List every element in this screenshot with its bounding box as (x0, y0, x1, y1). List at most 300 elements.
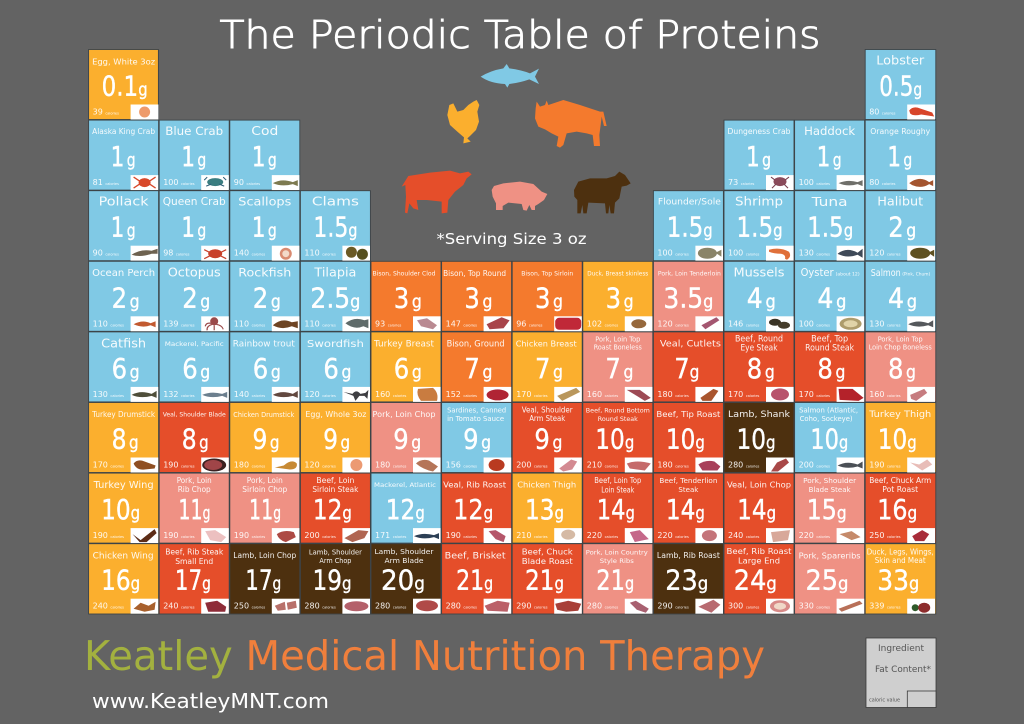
name: Blue Crab (165, 124, 223, 138)
cell: Pork, Loin Top Roast Boneless: Roast Boneless (594, 343, 642, 351)
cell: Dungeness Crab (724, 120, 794, 190)
cell: Beef, Brisket (442, 544, 512, 614)
name: Mackerel, Atlantic (374, 481, 436, 489)
calories: 120 calories (304, 390, 336, 399)
cell: Beef, Tip Roast (653, 402, 723, 472)
thumb: veal (484, 528, 511, 543)
name: Flounder/Sole (658, 198, 721, 208)
name: Mussels (734, 264, 785, 279)
name: Rainbow trout (233, 339, 295, 349)
thumb: beef (625, 458, 652, 472)
thumb: lamb (342, 599, 370, 614)
cell: Bison, Shoulder Clod (371, 261, 441, 331)
value: 9g (463, 422, 491, 456)
value: 1g (111, 211, 136, 244)
cell: Scallops (230, 191, 300, 261)
value: 16g (101, 564, 140, 597)
cell: Tuna (795, 191, 865, 261)
thumb: pork (625, 387, 652, 402)
name: Veal, Loin Chop (727, 481, 791, 490)
cell: Pork, Loin Rib Chop (159, 473, 229, 543)
cell: Beef, Tenderlion Steak (653, 473, 723, 543)
thumb: beef (484, 599, 511, 614)
thumb: fish (837, 246, 864, 261)
footer brand: Keatley Medical Nutrition Therapy (84, 632, 765, 680)
cell: Beef, Top Round Steak (795, 332, 865, 402)
cell: Duck, Legs, Wings, Skin and Meat: Skin and Meat (875, 556, 926, 565)
name: Pork, Spareribs (799, 552, 861, 561)
name: Clams (312, 194, 359, 209)
calories: 171 calories (375, 531, 407, 540)
cell: Lamb, Rib Roast (653, 544, 723, 614)
name: Queen Crab (163, 196, 226, 208)
thumb: beef (554, 599, 582, 614)
name: Pork, Loin (177, 476, 212, 485)
value: 3g (606, 281, 634, 314)
icon: fish (481, 64, 539, 88)
name: Pork, Loin Top (595, 335, 641, 343)
thumb: ribs (625, 599, 652, 614)
calories: 220 calories (657, 531, 689, 540)
value: 12g (313, 493, 352, 526)
calories: 210 calories (516, 531, 548, 540)
name: Pork, Loin Chop (372, 410, 436, 419)
calories: 90 calories (234, 178, 260, 187)
name: Egg, White 3oz (92, 58, 155, 66)
cell: Pollack (89, 191, 159, 261)
thumb: meat (484, 316, 511, 331)
thumb: veal (766, 528, 794, 543)
cell: Veal, Shoulder Arm Steak: Arm Steak (529, 414, 566, 423)
thumb: beef (201, 599, 229, 614)
thumb: fish (342, 316, 370, 331)
thumb: beef (907, 528, 935, 543)
name: Beef, Rib Roast (726, 547, 792, 556)
cell: Catfish (89, 332, 159, 402)
name: Tuna (810, 194, 848, 209)
name: Bison, Ground (447, 339, 505, 349)
cell: Turkey Breast (371, 332, 441, 402)
calories: 102 calories (587, 319, 618, 328)
value: 2g (888, 211, 916, 244)
calories: 81 calories (93, 178, 119, 187)
name: Bison, Top Sirloin (521, 269, 573, 277)
value: 21g (596, 564, 634, 597)
thumb: beef (625, 528, 652, 543)
value: 6g (253, 352, 281, 385)
calories: 200 calories (516, 460, 548, 470)
name: Beef, Round Bottom (586, 406, 650, 414)
name: Pork, Loin Country (586, 549, 648, 557)
thumb: veal (554, 458, 582, 472)
calories: 100 calories (799, 319, 830, 328)
calories: 130 calories (93, 390, 124, 399)
thumb: egg (342, 458, 370, 472)
thumb: beef (695, 528, 723, 543)
calories: 100 calories (163, 178, 195, 187)
calories: 39 calories (93, 108, 119, 116)
cell: Beef, Rib Steak Small End: Small End (175, 557, 213, 566)
calories: 330 calories (799, 602, 830, 611)
name: Chicken Wing (93, 552, 154, 562)
cell: Veal, Loin Chop (724, 473, 794, 543)
value: 6g (112, 352, 140, 385)
name: Beef, Tenderlion (659, 477, 717, 485)
cell: Chicken Thigh (512, 473, 582, 543)
thumb: veal (695, 387, 723, 402)
calories: 80 calories (869, 178, 896, 187)
cell: Beef, Tenderlion Steak: Steak (678, 486, 699, 494)
cell: Turkey Wing (89, 473, 159, 543)
thumb: duck (907, 599, 935, 614)
name: Beef, Rib Steak (165, 548, 224, 557)
calories: 140 calories (234, 390, 265, 399)
value: 13g (525, 493, 564, 526)
thumb: egg (131, 104, 158, 120)
thumb: fish (272, 175, 299, 190)
calories: 190 calories (163, 460, 195, 470)
value: 7g (464, 352, 492, 385)
thumb: sardines (484, 458, 511, 472)
cell: Halibut (865, 191, 936, 261)
value: 0.5g (879, 70, 922, 102)
calories: 190 calories (93, 531, 124, 540)
thumb: turkey (413, 387, 441, 402)
value: 8g (747, 352, 775, 385)
value: 4g (888, 281, 917, 314)
thumb: turkey (907, 458, 935, 472)
value: 3g (535, 281, 563, 314)
legend key (866, 638, 936, 708)
value: 2.5g (310, 281, 360, 314)
name: Oyster (801, 267, 834, 279)
thumb: crab (201, 246, 229, 261)
cell: Alaska King Crab (89, 120, 159, 190)
calories: 132 calories (163, 390, 195, 399)
cell: Beef, Loin Sirloin Steak (300, 473, 370, 543)
value: 10g (666, 422, 705, 456)
thumb: fish (837, 175, 864, 190)
cell: Lamb, Shoulder Arm Blade: Arm Blade (384, 557, 423, 565)
value: 20g (381, 564, 425, 597)
calories: 200 calories (304, 531, 336, 540)
cell: Beef, Rib Roast Large End (724, 544, 794, 614)
thumb: beef (766, 599, 794, 614)
value: 10g (595, 422, 634, 456)
cell: Lamb, Loin Chop (230, 544, 300, 614)
calories: 98 calories (163, 249, 190, 258)
thumb: fish (131, 246, 158, 261)
name: Beef, Round (735, 334, 783, 344)
name: Shrimp (735, 194, 783, 209)
cell: Beef, Chuck Blade Roast: Blade Roast (522, 557, 573, 566)
cell: Duck, Legs, Wings, Skin and Meat (865, 544, 936, 614)
thumb: oyster (837, 316, 864, 331)
name: Chicken Drumstick (233, 411, 295, 419)
cell: Octopus (159, 261, 229, 331)
value: 3g (394, 281, 422, 314)
calories: 220 calories (587, 531, 618, 540)
calories: 170 calories (799, 390, 830, 399)
thumb: pork (837, 528, 864, 543)
calories: 280 calories (304, 602, 336, 611)
thumb: crab (201, 175, 229, 190)
name: Lobster (876, 54, 924, 68)
cell: Beef, Round Eye Steak (724, 332, 794, 402)
cell: Egg, Whole (300, 402, 370, 472)
icon: bison (535, 100, 607, 148)
website: www.KeatleyMNT.com (92, 689, 329, 713)
thumb: ground meat (484, 387, 511, 402)
icon: sheep (574, 172, 631, 213)
name: Orange Roughy (870, 127, 931, 136)
name: Lamb, Shank (728, 410, 790, 420)
calories: 93 calories (375, 319, 401, 328)
calories: 210 calories (587, 460, 618, 470)
name: Catfish (101, 335, 146, 350)
cell: Beef, Loin Sirloin Steak: Sirloin Steak (312, 485, 359, 494)
value: 7g (674, 352, 699, 385)
calories: 250 calories (234, 602, 265, 611)
name: Beef, Chuck (522, 548, 573, 557)
name: Turkey Drumstick (91, 410, 156, 419)
thumb: octopus (201, 316, 229, 331)
name: Octopus (168, 265, 221, 279)
value: 12g (386, 493, 425, 526)
calories: 190 calories (234, 531, 265, 540)
cell: Lamb, Shank (724, 402, 794, 472)
name: Veal, Cutlets (660, 339, 722, 349)
cell: Lamb, Shoulder Arm Chop: Arm Chop (319, 557, 352, 565)
value: 1g (746, 140, 771, 173)
cell: Rockfish (230, 261, 300, 331)
thumb: pork (201, 528, 229, 543)
cell: Beef, Loin Top Loin Steak: Loin Steak (601, 486, 635, 495)
value: 6g (323, 352, 351, 385)
calories: 110 calories (93, 319, 124, 328)
icon: pig (492, 182, 547, 211)
name: Haddock (804, 124, 855, 138)
thumb: pork (907, 387, 935, 402)
value: 1.5g (667, 211, 713, 244)
value: 1g (887, 140, 912, 173)
calories: 130 calories (799, 249, 830, 258)
name: Pork, Shoulder (803, 477, 856, 485)
calories: 280 calories (446, 602, 477, 611)
calories: 220 calories (799, 531, 830, 540)
cell: Pork, Shoulder Blade Steak: Blade Steak (809, 486, 852, 494)
cell: Mackerel, Atlantic (371, 473, 441, 543)
calories: 240 calories (728, 531, 760, 540)
thumb: veal (201, 458, 229, 472)
cell: Shrimp (724, 191, 794, 261)
value: 1g (181, 140, 206, 173)
value: 4g (747, 281, 776, 314)
cell: Duck, Breast skinless (583, 261, 653, 331)
icon: cow (402, 171, 472, 213)
cell: Turkey Drumstick (89, 402, 159, 472)
cell: Clams (300, 191, 370, 261)
value: 2g (182, 281, 210, 314)
cell: Salmon (Atlantic, Coho, Sockeye): Coho, Sockeye) (800, 415, 853, 423)
thumb: shrimp (766, 246, 794, 261)
name: Lamb, Loin Chop (233, 551, 297, 560)
cell: Salmon (Pink, Chum): (Pink, Chum) (902, 271, 930, 277)
value: 7g (605, 352, 633, 385)
value: 1g (111, 140, 136, 173)
value: 1g (252, 211, 277, 244)
cell: Pork, Loin Country Style Ribs: Style Ribs (600, 557, 634, 565)
table of protein cells (89, 50, 936, 614)
calories: 290 calories (657, 602, 689, 611)
value: 2g (253, 281, 281, 314)
name: Pork, Loin Top (878, 335, 923, 343)
value: 14g (597, 493, 635, 526)
name: Turkey Thigh (868, 410, 931, 420)
thumb: lamb (766, 458, 794, 472)
title: The Periodic Table of Proteins (220, 13, 820, 57)
calories: 156 calories (446, 460, 477, 470)
name: Dungeness Crab (728, 127, 791, 136)
cell: Chicken Drumstick (230, 402, 300, 472)
value: 6g (394, 352, 422, 385)
value: 1.5g (313, 211, 357, 244)
calories: 190 calories (869, 460, 901, 470)
cell: Lamb, Shoulder Arm Chop (300, 544, 370, 614)
calories: 250 calories (869, 531, 901, 540)
legend key: Fat Content* (875, 665, 931, 675)
calories: 110 calories (234, 319, 265, 328)
value: 8g (817, 352, 845, 385)
calories: 120 calories (304, 460, 336, 470)
legend key: caloric value (869, 698, 900, 704)
name: Pork, Loin Tenderloin (658, 269, 721, 277)
name: Mackerel, Pacific (165, 340, 224, 348)
thumb: chicken (554, 387, 582, 402)
calories: 170 calories (728, 390, 760, 399)
cell: Pork, Spareribs (795, 544, 865, 614)
thumb: beef (695, 458, 723, 472)
calories: 180 calories (375, 460, 407, 470)
name: Chicken Breast (516, 339, 577, 348)
cell: Veal, Rib Roast (442, 473, 512, 543)
thumb: pork (272, 528, 299, 543)
name: Alaska King Crab (92, 127, 155, 136)
calories: 180 calories (234, 460, 265, 470)
cell: Lobster (865, 50, 936, 120)
calories: 180 calories (657, 390, 689, 399)
cell: Chicken Wing (89, 544, 159, 614)
value: 17g (245, 564, 281, 597)
calories: 160 calories (587, 390, 618, 399)
value: 21g (456, 564, 493, 597)
name: Halibut (877, 194, 923, 209)
cell: Sardines (442, 402, 512, 472)
cell: Pork, Shoulder Blade Steak (795, 473, 865, 543)
name: Rockfish (238, 265, 291, 279)
cell: Mussels (724, 261, 794, 331)
calories: 280 calories (587, 602, 618, 611)
name: Swordfish (307, 339, 364, 350)
value: 17g (175, 564, 211, 597)
cell: Rainbow trout (230, 332, 300, 402)
value: 10g (736, 422, 775, 456)
name: Ocean Perch (92, 268, 155, 279)
name: Pork, Loin (247, 476, 283, 485)
name: Bison, Shoulder Clod (372, 269, 436, 277)
name: Egg, Whole 3oz (305, 410, 366, 419)
cell: Beef, Round Bottom Round Steak (583, 402, 653, 472)
name: Turkey Breast (373, 339, 435, 349)
value: 12g (453, 493, 493, 526)
value: 14g (737, 493, 776, 526)
cell: Bison, Top Round (442, 261, 512, 331)
thumb: swordfish (342, 387, 370, 402)
value: 1g (817, 140, 842, 173)
cell: Swordfish (300, 332, 370, 402)
thumb: beef (837, 387, 864, 402)
value: 8g (112, 422, 139, 456)
calories: 139 calories (163, 319, 195, 328)
value: 9g (393, 422, 421, 456)
thumb: lamb (413, 599, 441, 614)
cell: Oyster (795, 261, 865, 331)
name: Turkey Wing (93, 480, 154, 491)
cell: Pork, Loin Top Roast Boneless (583, 332, 653, 402)
name: Beef, Loin Top (594, 476, 641, 485)
cell: Beef, Rib Steak Small End (159, 544, 229, 614)
name: Beef, Chuck Arm (869, 476, 931, 485)
name: Sardines, Canned (447, 406, 506, 414)
value: 14g (666, 493, 705, 526)
cell: Veal, Cutlets (653, 332, 723, 402)
thumb: fish (413, 528, 441, 543)
thumb: fish (131, 387, 158, 402)
calories: 147 calories (446, 319, 477, 328)
icon: chicken (447, 100, 479, 143)
thumb: wing (131, 599, 158, 614)
thumb: clams (342, 246, 370, 261)
calories: 190 calories (163, 531, 195, 540)
value: 9g (252, 422, 280, 456)
cell: Mackerel, Pacific (159, 332, 229, 402)
calories: 200 calories (799, 460, 830, 470)
value: 3.5g (663, 281, 713, 314)
cell: Salmon (Atlantic, Coho, Sockeye) (795, 402, 865, 472)
value: 15g (807, 493, 847, 526)
thumb: pork (413, 458, 441, 472)
cell: Egg White (89, 50, 158, 120)
calories: 120 calories (869, 249, 901, 258)
name: Cod (251, 123, 278, 138)
value: 10g (878, 422, 917, 456)
thumb: fish (131, 316, 158, 331)
serving size note: *Serving Size 3 oz (436, 230, 586, 248)
value: 1.5g (736, 211, 782, 244)
name: Beef, Brisket (445, 552, 506, 562)
cell: Pork, Loin Country Style Ribs (583, 544, 653, 614)
thumb: fish (907, 316, 935, 331)
thumb: beef (342, 528, 370, 543)
name: Salmon (871, 268, 901, 279)
cell: Pork, Loin Tenderloin (653, 261, 723, 331)
calories: 160 calories (869, 390, 901, 399)
value: 25g (805, 564, 848, 597)
name: Salmon (Atlantic, (799, 406, 858, 414)
thumb: scallop (272, 246, 299, 261)
cell: Tilapia (300, 261, 370, 331)
name: Lamb, Shoulder (374, 548, 434, 556)
